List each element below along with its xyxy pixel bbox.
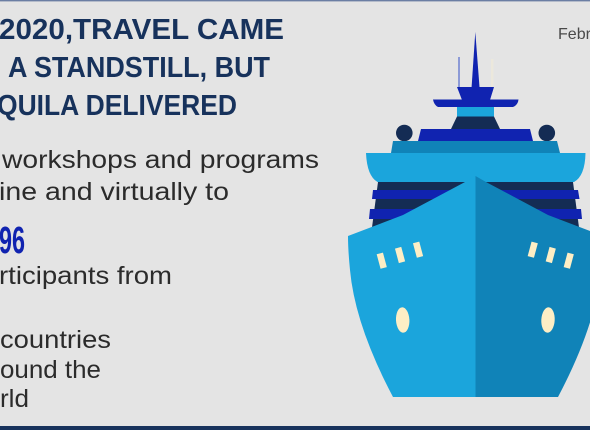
countries text: ound the: [0, 356, 101, 384]
intro text: workshops and programs: [1, 146, 319, 174]
title: QUILA DELIVERED: [0, 90, 237, 122]
ship stripes: [369, 182, 582, 235]
ship hull: [348, 176, 590, 397]
participants text: rticipants from: [0, 262, 172, 290]
countries text: [0, 326, 111, 413]
icon: cruise ship: [348, 32, 590, 397]
ship masts: [458, 32, 493, 87]
date label: Febr: [558, 26, 590, 43]
intro text: ine and virtually to: [0, 178, 229, 206]
intro text: [0, 146, 319, 206]
participant count: 96: [0, 220, 25, 262]
title: 2020,TRAVEL CAME: [0, 14, 284, 46]
title: [0, 14, 284, 122]
bottom border: [0, 426, 590, 430]
ship upper deck: [366, 141, 586, 182]
countries text: rld: [0, 385, 29, 413]
countries text: countries: [0, 326, 111, 354]
ship bridge: [418, 87, 533, 141]
ship windows: [377, 242, 574, 333]
ship funnels: [396, 125, 555, 141]
title: A STANDSTILL, BUT: [8, 52, 270, 84]
